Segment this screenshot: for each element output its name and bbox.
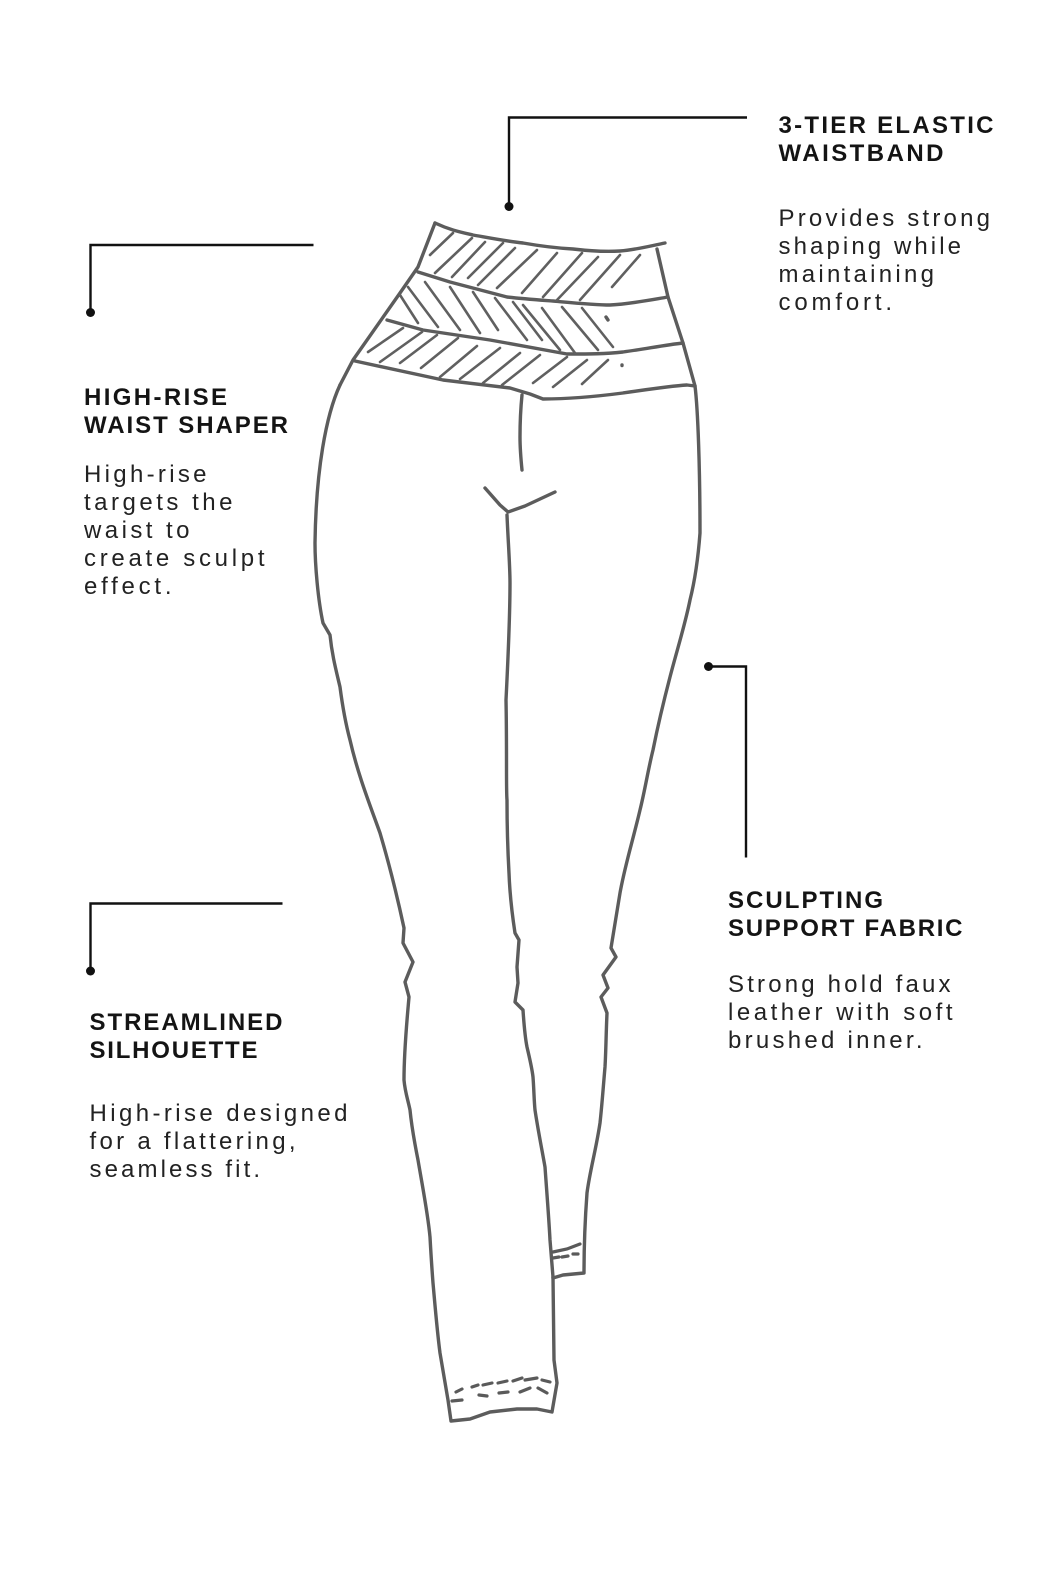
callout text: waistband: shaping while <box>778 233 961 260</box>
callout text: waistband: comfort. <box>778 289 892 316</box>
callout text: fabric <box>728 887 962 1054</box>
callout text: waistband: Provides strong <box>778 205 990 232</box>
callout line: waistband <box>504 118 747 211</box>
callout text: silhouette: SILHOUETTE <box>90 1037 258 1064</box>
right leg outline <box>553 249 700 1278</box>
callout text: waist shaper <box>83 384 288 600</box>
callout text: waistband: WAISTBAND <box>778 140 944 167</box>
callout text: waist shaper: waist to <box>83 517 190 544</box>
callout text: waistband: 3-TIER ELASTIC <box>778 112 994 139</box>
waistband hatching <box>368 233 640 387</box>
left cuff stitching <box>452 1378 550 1401</box>
callout line: fabric <box>704 662 746 858</box>
callout text: silhouette: STREAMLINED <box>90 1009 282 1036</box>
waistband outline <box>340 223 695 399</box>
callout text: silhouette: High-rise designed <box>90 1100 348 1127</box>
callout text: waistband <box>778 112 994 316</box>
callout text: waist shaper: WAIST SHAPER <box>84 412 288 439</box>
callout text: fabric: leather with soft <box>728 999 953 1026</box>
callout text: fabric: SCULPTING <box>728 887 883 914</box>
crotch seam <box>485 488 555 512</box>
callout text: waist shaper: effect. <box>84 573 172 600</box>
inner leg seam <box>506 515 553 1277</box>
callout text: waistband: maintaining <box>778 261 934 288</box>
callout text: waist shaper: targets the <box>84 489 232 516</box>
callout text: waist shaper: High-rise <box>84 461 206 488</box>
right cuff stitching <box>553 1244 580 1258</box>
callout line: silhouette <box>86 904 282 976</box>
callout line: waist shaper <box>86 245 314 317</box>
callout text: fabric: Strong hold faux <box>728 971 950 998</box>
callout text: silhouette: seamless fit. <box>90 1156 260 1183</box>
left leg outline <box>315 385 557 1421</box>
leggings sketch <box>315 223 700 1421</box>
callout text: waist shaper: HIGH-RISE <box>84 384 227 411</box>
callout text: silhouette <box>90 1009 348 1183</box>
callout text: fabric: SUPPORT FABRIC <box>728 915 962 942</box>
callout text: silhouette: for a flattering, <box>90 1128 296 1155</box>
fly seam <box>520 395 522 470</box>
callout text: waist shaper: create sculpt <box>84 545 265 572</box>
callout text: fabric: brushed inner. <box>728 1027 922 1054</box>
